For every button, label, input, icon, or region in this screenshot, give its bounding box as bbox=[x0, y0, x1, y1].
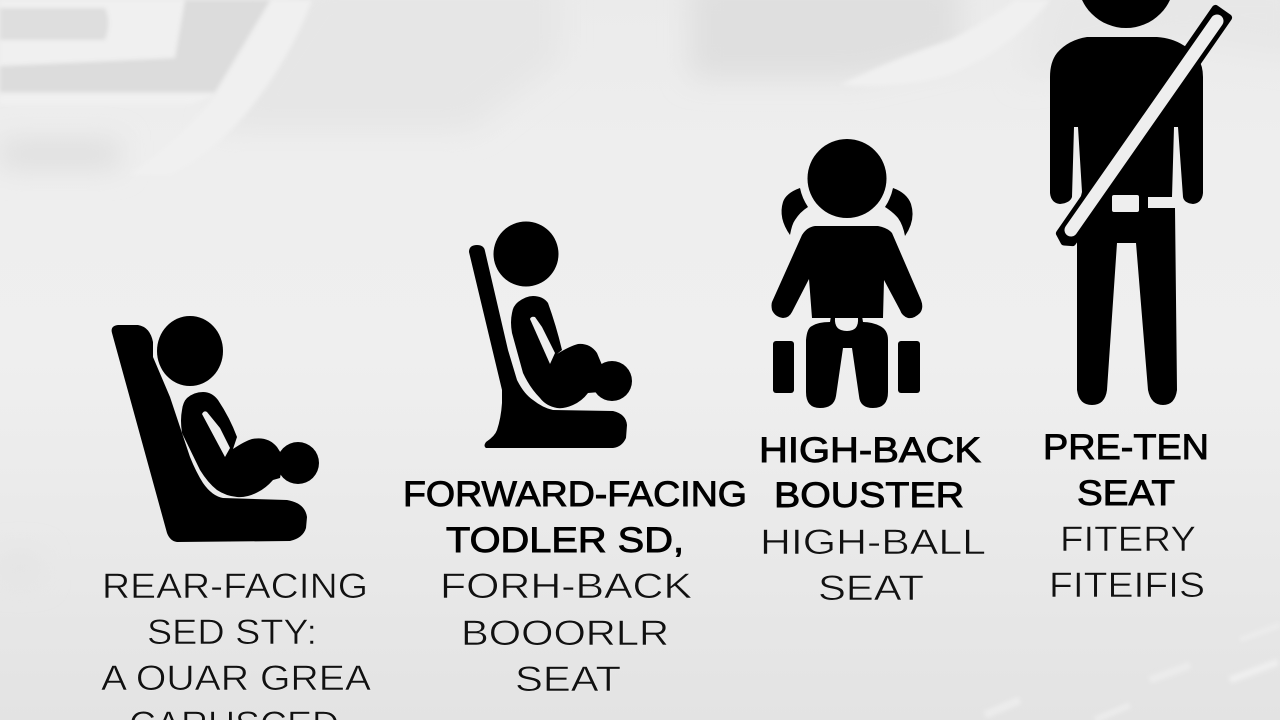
torso and arms bbox=[772, 226, 922, 318]
label: high-back booster: SEAT bbox=[818, 569, 924, 608]
label: pre-teen seat: FITEIFIS bbox=[1049, 566, 1205, 605]
child body bbox=[511, 296, 632, 408]
label: forward-facing toddler seat: SEAT bbox=[515, 660, 621, 699]
head bbox=[808, 139, 886, 218]
icon: forward-facing toddler seat bbox=[469, 222, 632, 448]
belt loop bbox=[1112, 195, 1139, 212]
side bolsters bbox=[773, 341, 794, 393]
label: rear-facing seat: SED STY: bbox=[147, 613, 317, 652]
seat shell bbox=[112, 325, 307, 542]
label: pre-teen seat: SEAT bbox=[1077, 474, 1175, 513]
label: rear-facing seat: A OUAR GREA bbox=[101, 659, 372, 698]
icon: pre-teen with seat belt bbox=[1050, 0, 1229, 405]
seat shell bbox=[469, 245, 627, 448]
seat belt bbox=[1059, 8, 1229, 243]
body bbox=[1050, 37, 1203, 405]
label: forward-facing toddler seat: TODLER SD, bbox=[446, 521, 684, 560]
child body bbox=[181, 392, 319, 497]
label: pre-teen seat: PRE-TEN bbox=[1043, 428, 1209, 467]
label: rear-facing seat bbox=[101, 567, 372, 720]
label: rear-facing seat: REAR-FACING bbox=[102, 567, 368, 606]
head bbox=[1078, 0, 1174, 28]
label: pre-teen seat: FITERY bbox=[1060, 520, 1196, 559]
label: high-back booster: HIGH-BACK bbox=[759, 431, 981, 470]
label: forward-facing toddler seat bbox=[403, 475, 747, 699]
head bbox=[494, 222, 558, 286]
label: high-back booster: HIGH-BALL bbox=[760, 523, 986, 562]
belly gap bbox=[835, 318, 858, 331]
label: forward-facing toddler seat: FORWARD-FACING bbox=[403, 475, 747, 514]
pigtails bbox=[782, 188, 808, 235]
label: pre-teen seat bbox=[1043, 428, 1209, 605]
label: forward-facing toddler seat: FORH-BACK bbox=[440, 567, 692, 606]
legs bbox=[806, 316, 888, 408]
arm gap bbox=[202, 411, 230, 457]
head bbox=[157, 316, 223, 386]
icon: rear-facing seat bbox=[112, 316, 319, 542]
label: forward-facing toddler seat: BOOORLR bbox=[461, 614, 669, 653]
arm gap bbox=[530, 317, 555, 364]
label: high-back booster bbox=[759, 431, 986, 608]
icon: high-back booster bbox=[772, 139, 922, 408]
label: high-back booster: BOUSTER bbox=[774, 476, 964, 515]
